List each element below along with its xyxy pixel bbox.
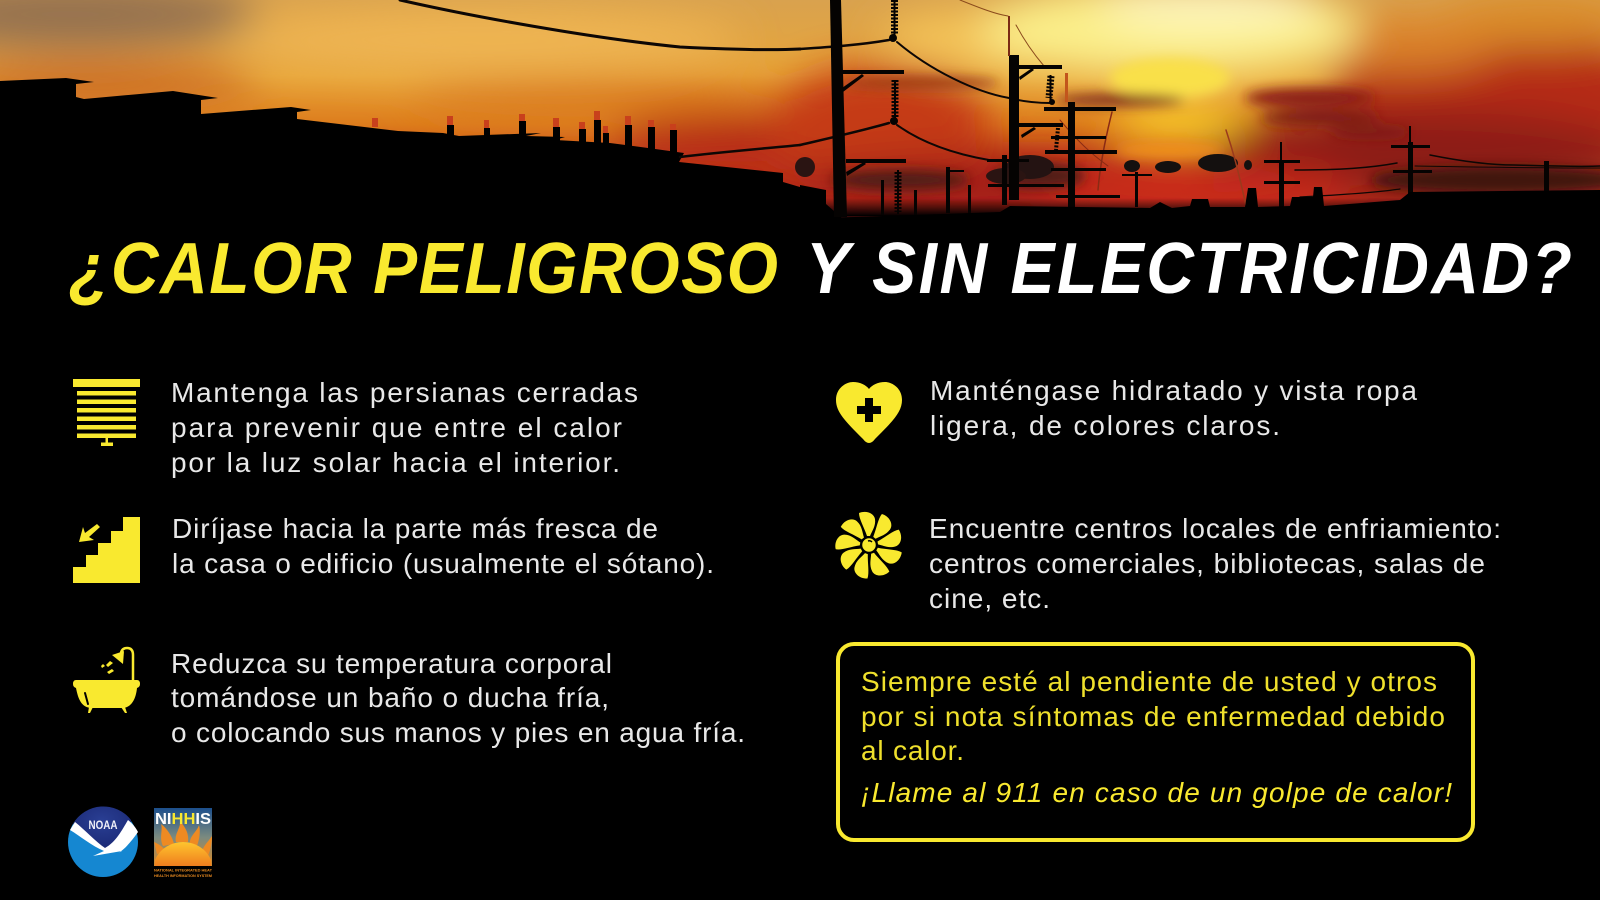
text: cool bath or shower: Reduzca su temperatura corporal (171, 648, 612, 679)
transmission poles (830, 0, 1549, 217)
icon: fan (835, 512, 903, 580)
icon: heart with cross (836, 382, 902, 443)
text: close the blinds: para prevenir que entre el calor (171, 412, 622, 443)
logo: NOAA (68, 806, 138, 877)
dark clouds (795, 154, 1252, 184)
text: close the blinds (171, 377, 638, 478)
text: cooling centers: cine, etc. (929, 583, 1050, 614)
silhouette: rooftops (0, 78, 850, 225)
text: cool bath or shower: tomándose un baño o ducha fría, (171, 682, 609, 713)
silhouette: horizon (800, 185, 1600, 225)
text: coolest part of the house: Diríjase hacia la parte más fresca de (172, 513, 658, 544)
power lines (400, 0, 1600, 205)
rooftop rebar tips (372, 111, 676, 133)
callout: heat illness warning (838, 644, 1473, 840)
title: yellow part: ¿CALOR PELIGROSO (69, 227, 778, 309)
text: cooling centers: centros comerciales, bibliotecas, salas de (929, 548, 1485, 579)
title: white part: Y SIN ELECTRICIDAD? (806, 227, 1572, 309)
icon: window blinds (73, 379, 140, 446)
photo: sunset sky with power lines (0, 0, 1600, 225)
text: close the blinds: por la luz solar hacia el interior. (171, 447, 620, 478)
callout: heat illness warning: por si nota síntomas de enfermedad debido (861, 701, 1445, 732)
logo: NIHHIS: NATIONAL INTEGRATED HEAT (154, 868, 213, 872)
logo: NIHHIS: NIHHIS (155, 811, 211, 828)
sky glow (0, 0, 1600, 216)
callout: heat illness warning: ¡Llame al 911 en caso de un golpe de calor! (861, 777, 1452, 808)
logo: NIHHIS (154, 808, 213, 878)
icon: stairs with down arrow (73, 517, 140, 583)
text: cool bath or shower: o colocando sus manos y pies en agua fría. (171, 717, 745, 748)
icon: bathtub with shower (73, 648, 140, 713)
title (69, 227, 1572, 309)
text: hydrate and light clothes: Manténgase hidratado y vista ropa (930, 375, 1417, 406)
text: cool bath or shower (171, 648, 745, 748)
text: hydrate and light clothes: ligera, de colores claros. (930, 410, 1280, 441)
text: close the blinds: Mantenga las persianas cerradas (171, 377, 638, 408)
text: coolest part of the house: la casa o edificio (usualmente el sótano). (172, 548, 714, 579)
callout: heat illness warning: Siempre esté al pendiente de usted y otros (861, 666, 1437, 697)
logo: NOAA: NOAA (88, 820, 118, 832)
text: hydrate and light clothes (930, 375, 1417, 441)
text: cooling centers (929, 513, 1501, 614)
text: cooling centers: Encuentre centros locales de enfriamiento: (929, 513, 1501, 544)
logo: NIHHIS: HEALTH INFORMATION SYSTEM (154, 873, 213, 878)
text: coolest part of the house (172, 513, 714, 579)
insulator strings (894, 0, 1058, 212)
callout: heat illness warning: al calor. (861, 735, 964, 766)
